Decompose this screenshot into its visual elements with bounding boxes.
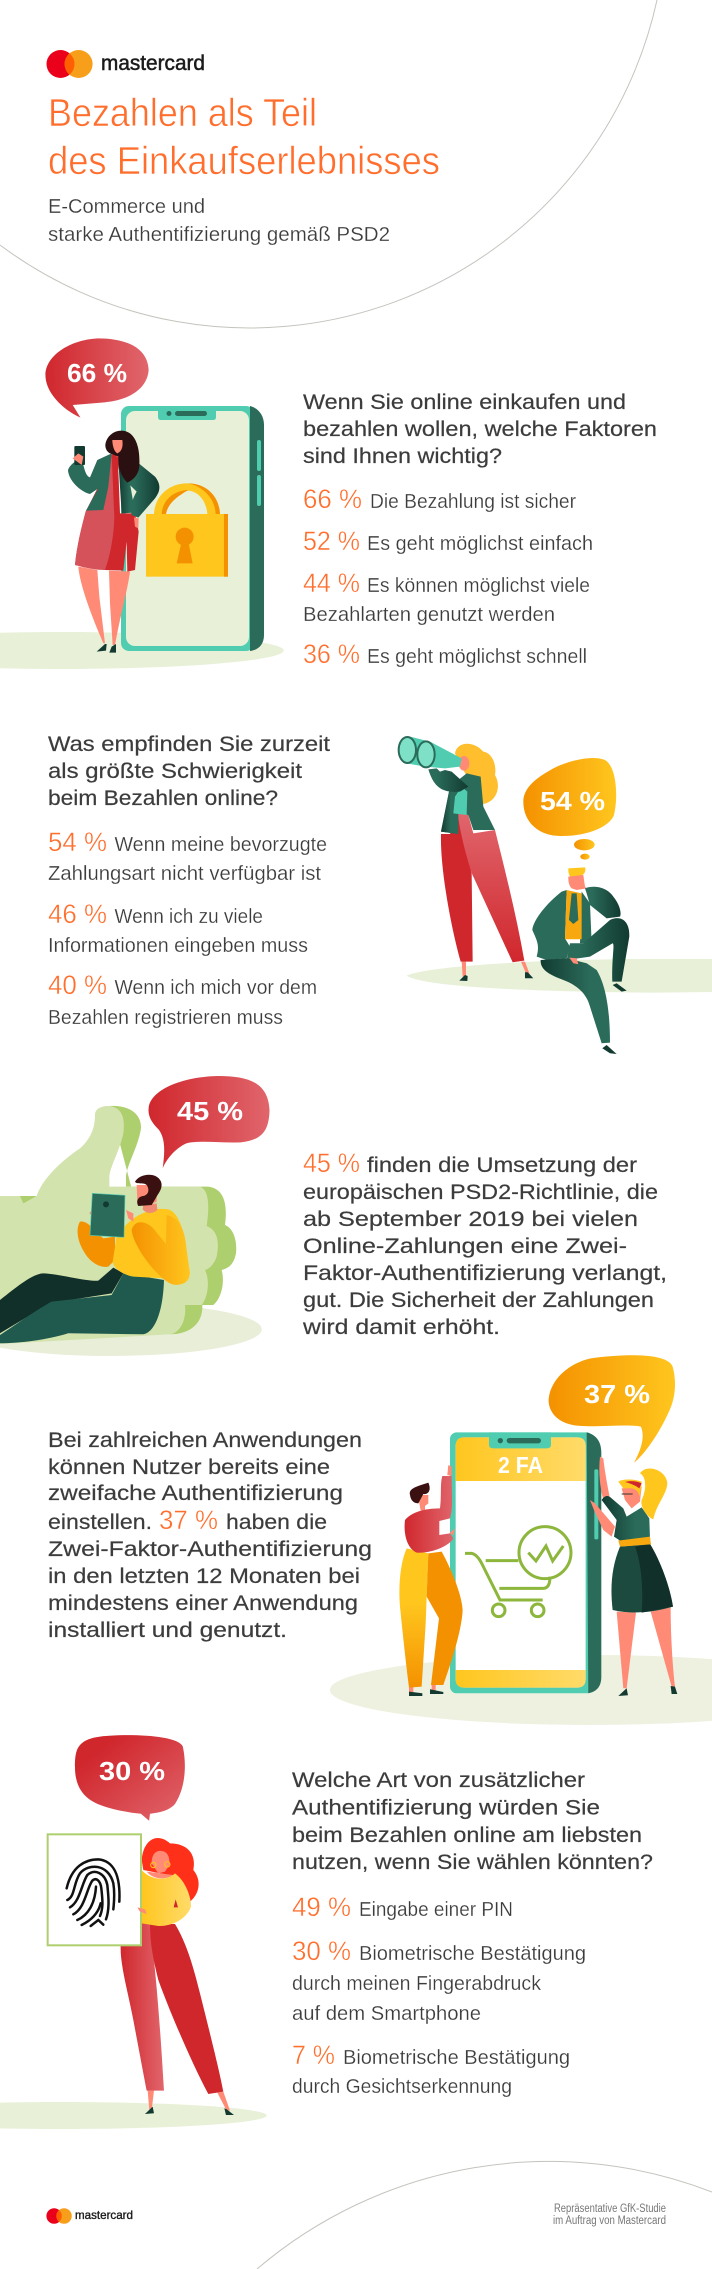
header <box>46 50 440 246</box>
illustration: phone with cart and two people <box>330 1432 712 1725</box>
item: 7 %: 7 % <box>292 2040 335 2070</box>
item: 7 %: Biometrische Bestätigung <box>343 2047 570 2069</box>
item: 54 %: Wenn meine bevorzugte <box>114 834 327 856</box>
text block: gut. Die Sicherheit der Zahlungen <box>303 1289 654 1312</box>
item: 40 %: Wenn ich mich vor dem <box>114 977 317 999</box>
heading <box>303 391 657 468</box>
item: 44 %: Bezahlarten genutzt werden <box>303 604 555 626</box>
text block: europäischen PSD2-Richtlinie, die <box>303 1181 658 1204</box>
ground shape <box>407 959 712 993</box>
text block: ab September 2019 bei vielen <box>303 1208 638 1231</box>
text block: mindestens einer Anwendung <box>48 1592 358 1615</box>
item: 36 % <box>303 639 587 669</box>
text block: Bei zahlreichen Anwendungen <box>48 1429 362 1452</box>
item: 46 %: Wenn ich zu viele <box>114 906 263 928</box>
phone label: 2 FA: 2 FA <box>498 1452 543 1478</box>
illustration: thumbs up with man <box>0 1106 262 1356</box>
logo: mastercard: mastercard <box>101 52 205 75</box>
heading: nutzen, wenn Sie wählen könnten? <box>292 1851 653 1874</box>
logo: mastercard small: mastercard <box>75 2208 133 2222</box>
speech bubble: 45 % <box>149 1076 270 1168</box>
thought bubble: 54 % <box>523 758 616 860</box>
heading: bezahlen wollen, welche Faktoren <box>303 418 657 441</box>
logo: mastercard <box>46 50 205 78</box>
speech bubble: 45 %: 45 % <box>177 1096 243 1126</box>
speech bubble: 66 %: 66 % <box>67 358 127 388</box>
heading <box>48 733 330 810</box>
item: 40 %: Bezahlen registrieren muss <box>48 1007 283 1029</box>
text block <box>48 1429 372 1642</box>
item: 7 % <box>292 2040 570 2098</box>
item: 30 %: durch meinen Fingerabdruck <box>292 1973 542 1995</box>
speech bubble: 66 % <box>45 338 149 418</box>
illustration: phone with lock <box>121 406 264 651</box>
text block: haben die <box>226 1511 327 1534</box>
heading: Authentifizierung würden Sie <box>292 1796 600 1820</box>
ground shape <box>0 2102 267 2129</box>
item: 36 %: 36 % <box>303 639 360 669</box>
panel: difficulties <box>48 733 712 1054</box>
text block: einstellen. <box>48 1511 152 1534</box>
source note <box>553 2203 666 2227</box>
speech bubble: 30 % <box>75 1735 185 1821</box>
panel: PSD2 approval <box>0 1076 667 1356</box>
decorative header circle <box>0 0 657 328</box>
item: 30 %: 30 % <box>292 1936 351 1966</box>
title: Bezahlen als Teil <box>48 92 317 135</box>
text block: wird damit erhöht. <box>302 1316 500 1339</box>
heading: beim Bezahlen online? <box>48 787 278 810</box>
heading: als größte Schwierigkeit <box>48 760 302 783</box>
text block: in den letzten 12 Monaten bei <box>48 1565 360 1588</box>
item: 44 %: 44 % <box>303 568 360 598</box>
panel: biometric <box>0 1735 653 2129</box>
text block: Faktor-Authentifizierung verlangt, <box>303 1262 667 1285</box>
item: 30 % <box>292 1936 586 2025</box>
text block: können Nutzer bereits eine <box>48 1456 330 1479</box>
text block: Zwei-Faktor-Authentifizierung <box>48 1538 372 1561</box>
item: 44 % <box>303 568 590 626</box>
decorative footer circle <box>257 2161 712 2269</box>
panel: two-factor <box>48 1355 712 1725</box>
thought bubble: 54 %: 54 % <box>540 786 605 816</box>
item: 66 % <box>303 484 576 514</box>
item: 40 % <box>48 970 317 1029</box>
item: 49 %: 49 % <box>292 1892 351 1922</box>
panel: factors <box>0 338 657 669</box>
heading: Wenn Sie online einkaufen und <box>303 391 626 414</box>
item: 40 %: 40 % <box>48 970 107 1000</box>
text block: 37 % <box>159 1505 218 1535</box>
item: 46 %: Informationen eingeben muss <box>48 935 308 957</box>
subtitle: starke Authentifizierung gemäß PSD2 <box>48 224 390 246</box>
text block: zweifache Authentifizierung <box>48 1482 343 1505</box>
item: 46 %: 46 % <box>48 899 107 929</box>
item: 66 %: 66 % <box>303 484 362 514</box>
item: 7 %: durch Gesichtserkennung <box>292 2076 512 2098</box>
illustration: woman with phone <box>68 431 159 653</box>
heading: sind Ihnen wichtig? <box>303 445 502 468</box>
illustration: woman with binoculars <box>399 737 533 981</box>
speech bubble: 30 %: 30 % <box>99 1756 165 1786</box>
item: 52 %: 52 % <box>303 526 360 556</box>
subtitle <box>48 196 390 246</box>
illustration: woman with fingerprint sign <box>48 1834 234 2115</box>
speech bubble: 37 % <box>549 1355 675 1463</box>
icon: fingerprint <box>67 1859 119 1926</box>
item: 52 %: Es geht möglichst einfach <box>367 533 593 555</box>
heading: Was empfinden Sie zurzeit <box>48 733 330 756</box>
footer <box>46 2203 666 2227</box>
speech bubble: 37 %: 37 % <box>584 1379 650 1409</box>
text block: finden die Umsetzung der <box>367 1154 637 1177</box>
text block: Online-Zahlungen eine Zwei- <box>303 1235 627 1258</box>
item: 44 %: Es können möglichst viele <box>367 575 590 597</box>
item: 49 % <box>292 1892 513 1922</box>
item: 66 %: Die Bezahlung ist sicher <box>370 491 576 513</box>
text block: 45 % <box>303 1148 360 1178</box>
source note: im Auftrag von Mastercard <box>553 2215 666 2227</box>
item: 54 %: 54 % <box>48 827 107 857</box>
item: 30 %: Biometrische Bestätigung <box>359 1943 586 1965</box>
source note: Repräsentative GfK-Studie <box>554 2203 666 2215</box>
text block <box>302 1148 667 1339</box>
title <box>48 92 440 183</box>
title: des Einkaufserlebnisses <box>48 140 440 183</box>
logo: mastercard small <box>46 2208 133 2224</box>
item: 52 % <box>303 526 593 556</box>
heading: beim Bezahlen online am liebsten <box>292 1824 642 1847</box>
item: 49 %: Eingabe einer PIN <box>359 1899 513 1921</box>
item: 36 %: Es geht möglichst schnell <box>367 646 587 668</box>
item: 30 %: auf dem Smartphone <box>292 2003 481 2025</box>
item: 54 % <box>48 827 327 885</box>
illustration: sitting man <box>532 867 629 1054</box>
text block: installiert und genutzt. <box>48 1619 287 1642</box>
item: 46 % <box>48 899 308 957</box>
heading <box>292 1769 653 1874</box>
ground shape <box>0 632 284 669</box>
subtitle: E-Commerce und <box>48 196 205 218</box>
item: 54 %: Zahlungsart nicht verfügbar ist <box>48 863 321 885</box>
heading: Welche Art von zusätzlicher <box>292 1769 585 1792</box>
